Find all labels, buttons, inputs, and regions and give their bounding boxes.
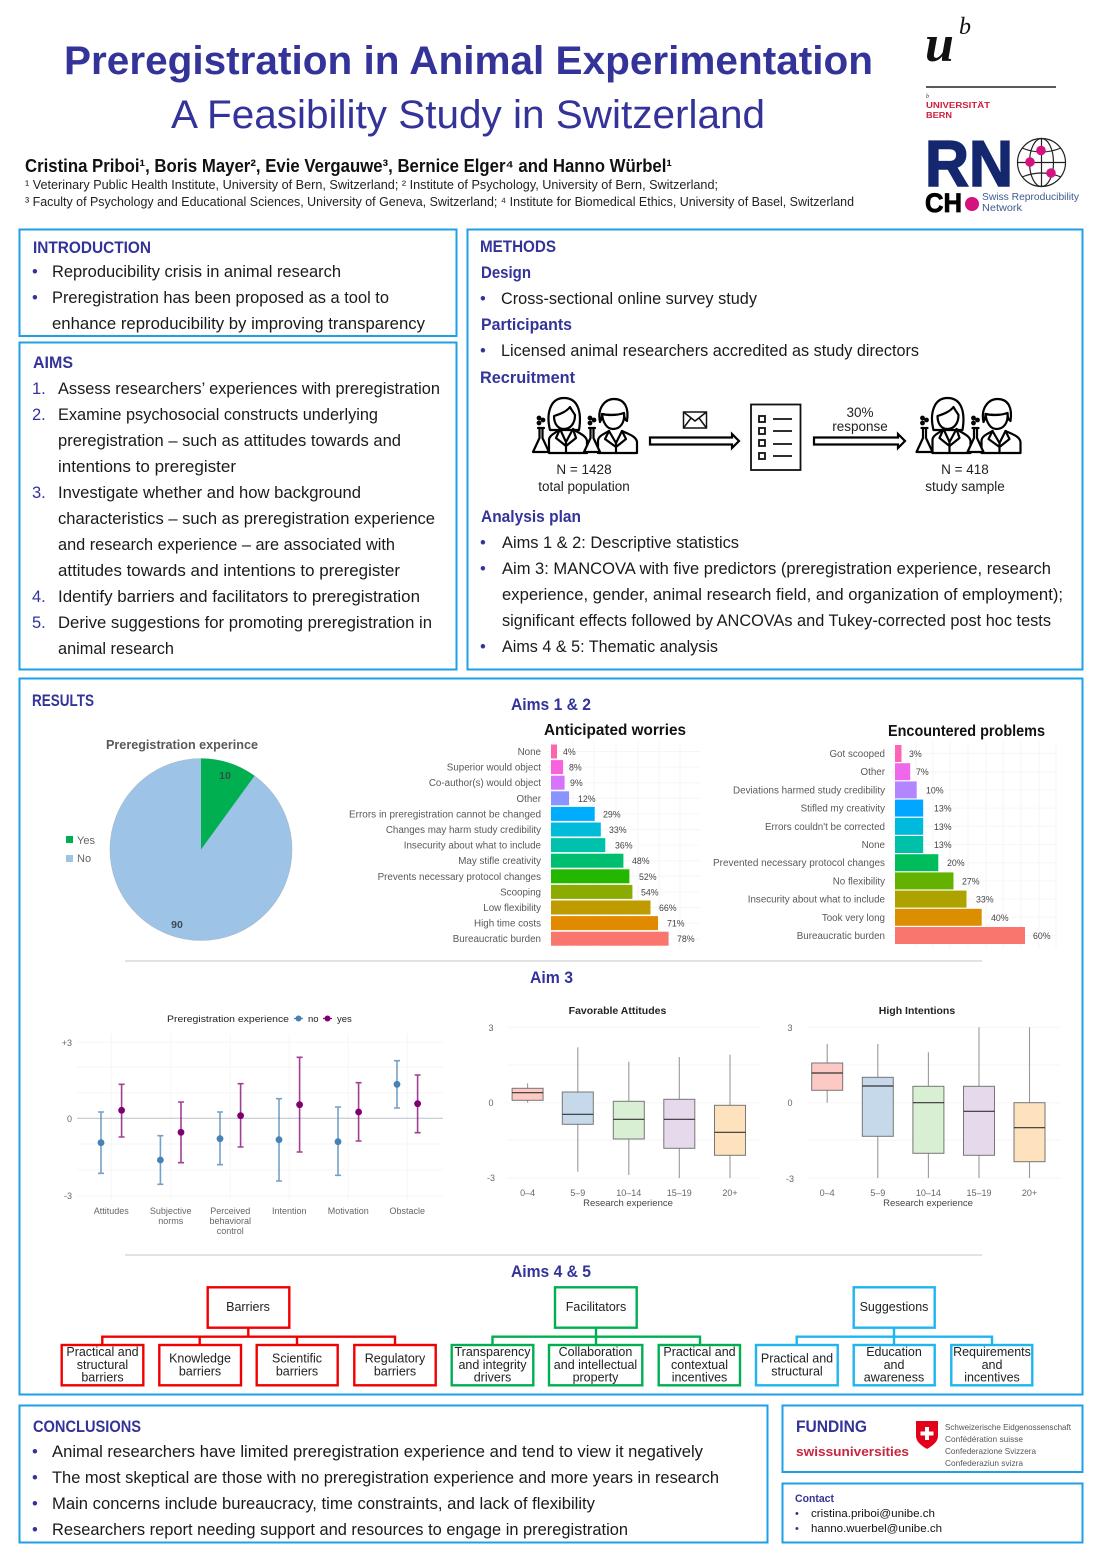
bar chart: encountered problems: Encountered problems xyxy=(888,723,1045,740)
dot plot: preregistration experience by construct: Attitudes xyxy=(94,1206,129,1216)
bar chart: encountered problems: Deviations harmed study credibility xyxy=(733,785,885,796)
dot plot: preregistration experience by construct: +3 xyxy=(62,1038,72,1048)
panel: aims: 2. xyxy=(32,406,46,424)
bar chart: encountered problems: Took very long xyxy=(822,913,885,924)
panel: conclusions: • xyxy=(32,1443,38,1461)
logo: Swiss Reproducibility Network: RN xyxy=(925,127,1013,200)
bar chart: anticipated worries: None xyxy=(518,747,542,758)
title: Preregistration in Animal Experimentation xyxy=(64,39,873,83)
bar chart: anticipated worries: Errors in preregistration cannot be changed xyxy=(349,809,541,820)
title xyxy=(64,39,873,137)
bar chart: anticipated worries: Superior would object xyxy=(447,763,541,774)
dot plot: preregistration experience by construct: Subjective xyxy=(150,1206,191,1216)
panel: results xyxy=(20,678,1082,1394)
panel: aims: attitudes towards and intentions to preregister xyxy=(58,562,401,580)
tree: facilitators: contextual xyxy=(671,1358,728,1372)
panel: funding: Schweizerische Eidgenossenschaft xyxy=(945,1422,1072,1432)
panel: conclusions: Animal researchers have limited preregistration experience and tend to view it negatively xyxy=(52,1443,704,1461)
icon: study sample researchers xyxy=(916,398,1020,453)
bar chart: encountered problems: Stifled my creativity xyxy=(801,804,885,815)
panel: introduction: • xyxy=(32,289,38,307)
panel: funding: Confederaziun svizra xyxy=(945,1458,1023,1468)
tree: facilitators: property xyxy=(573,1370,619,1384)
bar chart: encountered problems: 13% xyxy=(934,804,952,814)
tree: barriers: barriers xyxy=(276,1364,318,1378)
logo: University of Bern: b xyxy=(959,14,971,40)
pie chart: preregistration experience: 10 xyxy=(219,770,231,782)
panel: introduction: • xyxy=(32,263,38,281)
affiliations xyxy=(25,178,854,209)
bar chart: encountered problems: 3% xyxy=(909,749,922,759)
panel: methods: Aims 1 & 2: Descriptive statistics xyxy=(502,534,739,552)
tree: suggestions: and xyxy=(982,1358,1002,1372)
bar chart: anticipated worries: 36% xyxy=(615,841,633,851)
panel: contact: cristina.priboi@unibe.ch xyxy=(811,1508,935,1520)
legend: preregistration experience: yes xyxy=(337,1014,352,1025)
tree: suggestions: incentives xyxy=(964,1370,1020,1384)
dot plot: preregistration experience by construct: behavioral xyxy=(210,1216,251,1226)
bar chart: anticipated worries: 8% xyxy=(569,763,582,773)
pie chart: preregistration experience xyxy=(66,738,292,940)
logo: Swiss Reproducibility Network: Swiss Reproducibility xyxy=(982,191,1080,203)
panel: aims: 3. xyxy=(32,484,46,502)
panel: conclusions: The most skeptical are those with no preregistration experience and more years in research xyxy=(52,1469,719,1487)
box plot: high intentions: 10–14 xyxy=(916,1188,941,1198)
title: A Feasibility Study in Switzerland xyxy=(171,93,765,137)
bar chart: encountered problems: 33% xyxy=(976,895,994,905)
bar chart: anticipated worries: 78% xyxy=(677,934,695,944)
icon: questionnaire xyxy=(751,404,800,470)
panel: funding xyxy=(782,1406,1082,1472)
box plot: high intentions: 3 xyxy=(787,1023,793,1033)
bar chart: anticipated worries: Bureaucratic burden xyxy=(453,934,541,945)
icon: envelope xyxy=(684,412,706,428)
logo: Swiss Reproducibility Network: Network xyxy=(982,202,1023,214)
panel: methods: • xyxy=(480,342,486,360)
panel: conclusions: CONCLUSIONS xyxy=(33,1418,141,1436)
legend: preregistration experience xyxy=(167,1014,352,1025)
tree: facilitators: and intellectual xyxy=(554,1358,637,1372)
bar chart: anticipated worries: Other xyxy=(516,794,542,805)
box plot: favorable attitudes: Favorable Attitudes xyxy=(569,1005,666,1017)
bar chart: anticipated worries: 54% xyxy=(641,887,659,897)
box plot: favorable attitudes: 3 xyxy=(488,1023,494,1033)
panel: methods: Design xyxy=(481,264,531,282)
bar chart: encountered problems: 60% xyxy=(1033,931,1051,941)
bar chart: encountered problems: 10% xyxy=(926,785,944,795)
panel: contact: Contact xyxy=(795,1493,834,1505)
logo: Swiss Reproducibility Network xyxy=(925,127,1080,218)
panel: contact: • xyxy=(795,1523,799,1535)
bar chart: anticipated worries: 29% xyxy=(603,809,621,819)
bar chart: anticipated worries: Prevents necessary protocol changes xyxy=(378,872,541,883)
recruitment labels xyxy=(538,405,1005,494)
panel: methods: METHODS xyxy=(480,238,556,256)
panel: aims: Derive suggestions for promoting preregistration in xyxy=(58,614,432,632)
tree: facilitators: Practical and xyxy=(663,1345,736,1359)
bar chart: anticipated worries: 9% xyxy=(570,778,583,788)
bar chart: anticipated worries: Changes may harm study credibility xyxy=(386,825,541,836)
icon: total population researchers xyxy=(533,398,637,453)
recruitment labels: total population xyxy=(538,479,630,494)
logo: University of Bern xyxy=(925,14,1056,120)
legend: preregistration experience: Preregistration experience xyxy=(167,1014,289,1025)
panel: aims: 1. xyxy=(32,380,46,398)
panel: results: Aim 3 xyxy=(530,969,573,987)
box plot: favorable attitudes: 5–9 xyxy=(570,1188,585,1198)
legend: preregistration experience: no xyxy=(308,1014,319,1025)
panel: contact: hanno.wuerbel@unibe.ch xyxy=(811,1523,942,1535)
panel: conclusions: • xyxy=(32,1469,38,1487)
tree: facilitators: drivers xyxy=(474,1370,511,1384)
panel: aims: intentions to preregister xyxy=(58,458,237,476)
panel: contact xyxy=(782,1484,1082,1542)
recruitment labels: study sample xyxy=(925,479,1005,494)
bar chart: anticipated worries: Co-author(s) would object xyxy=(429,778,541,789)
bar chart: anticipated worries xyxy=(349,722,700,948)
tree: facilitators: Collaboration xyxy=(559,1345,632,1359)
authors: Cristina Priboi¹, Boris Mayer², Evie Vergauwe³, Bernice Elger⁴ and Hanno Würbel¹ xyxy=(25,156,672,176)
panel: introduction: Reproducibility crisis in animal research xyxy=(52,263,341,281)
bar chart: anticipated worries: 71% xyxy=(667,919,685,929)
recruitment labels: N = 1428 xyxy=(556,462,612,477)
tree: facilitators: Facilitators xyxy=(566,1300,626,1314)
tree: barriers: Knowledge xyxy=(169,1352,231,1366)
bar chart: encountered problems: No flexibility xyxy=(833,876,885,887)
dot plot: preregistration experience by construct: 0 xyxy=(67,1114,72,1124)
box plot: favorable attitudes: 0 xyxy=(488,1098,494,1108)
bar chart: anticipated worries: 66% xyxy=(659,903,677,913)
panel: aims: preregistration – such as attitudes towards and xyxy=(58,432,401,450)
logo: University of Bern: b xyxy=(926,94,929,100)
panel: conclusions: • xyxy=(32,1521,38,1539)
box plot: favorable attitudes: Research experience xyxy=(583,1198,673,1209)
tree: facilitators: incentives xyxy=(672,1370,727,1384)
recruitment labels: response xyxy=(832,419,888,434)
panel: methods: Aim 3: MANCOVA with five predictors (preregistration experience, research xyxy=(502,560,1051,578)
panel: aims: Assess researchers’ experiences with preregistration xyxy=(58,380,440,398)
bar chart: anticipated worries: 48% xyxy=(632,856,650,866)
recruitment labels: 30% xyxy=(846,405,874,420)
bar chart: anticipated worries: 33% xyxy=(609,825,627,835)
dot plot: preregistration experience by construct: Obstacle xyxy=(390,1206,425,1216)
panel: aims: 5. xyxy=(32,614,46,632)
bar chart: encountered problems: 27% xyxy=(962,876,980,886)
box plot: high intentions: -3 xyxy=(786,1174,794,1184)
logo: University of Bern: BERN xyxy=(926,111,952,120)
dot plot: preregistration experience by construct: Motivation xyxy=(328,1206,369,1216)
bar chart: anticipated worries: May stifle creativity xyxy=(458,856,541,867)
affiliations: ³ Faculty of Psychology and Educational Sciences, University of Geneva, Switzerland; ⁴ Institute for Biomedical Ethics, University of Basel, Switzerland xyxy=(25,195,854,209)
arrow: response xyxy=(814,434,905,448)
tree: suggestions: Suggestions xyxy=(860,1300,928,1314)
tree: barriers: Regulatory xyxy=(365,1352,426,1366)
panel: conclusions: Researchers report needing support and resources to engage in preregistration xyxy=(52,1521,628,1539)
panel: methods: Recruitment xyxy=(480,369,575,387)
panel: funding: swissuniversities xyxy=(796,1444,909,1459)
tree: barriers: barriers xyxy=(81,1370,124,1384)
tree: suggestions: Education xyxy=(866,1345,922,1359)
box plot: high intentions xyxy=(786,1005,1060,1209)
tree: barriers: barriers xyxy=(179,1364,221,1378)
panel: results: RESULTS xyxy=(32,692,94,710)
logo: University of Bern: u xyxy=(925,16,954,73)
panel: methods: experience, gender, animal research field, and organization of employment); xyxy=(502,586,1063,604)
tree: barriers: Barriers xyxy=(226,1300,270,1314)
bar chart: encountered problems: 7% xyxy=(916,767,929,777)
panel: results: Aims 1 & 2 xyxy=(511,696,591,714)
bar chart: anticipated worries: 12% xyxy=(578,794,596,804)
box plot: high intentions: 15–19 xyxy=(966,1188,992,1198)
tree: facilitators: Transparency xyxy=(455,1345,531,1359)
panel: aims xyxy=(20,342,456,670)
bar chart: encountered problems: None xyxy=(862,840,886,851)
bar chart: encountered problems: Got scooped xyxy=(829,749,885,760)
panel: methods: Analysis plan xyxy=(481,508,581,526)
panel: conclusions xyxy=(20,1406,768,1542)
bar chart: encountered problems: 40% xyxy=(991,913,1009,923)
dot plot: preregistration experience by construct: -3 xyxy=(64,1191,72,1201)
bar chart: anticipated worries: Low flexibility xyxy=(483,903,541,914)
box plot: favorable attitudes: 10–14 xyxy=(616,1188,641,1198)
panel: aims: 4. xyxy=(32,588,46,606)
tree: facilitators xyxy=(452,1287,740,1385)
dot plot: preregistration experience by construct: Perceived xyxy=(210,1206,250,1216)
panel: aims: Examine psychosocial constructs underlying xyxy=(58,406,378,424)
box plot: high intentions: Research experience xyxy=(883,1198,973,1209)
bar chart: encountered problems: 13% xyxy=(934,840,952,850)
box plot: favorable attitudes: 20+ xyxy=(722,1188,738,1198)
bar chart: encountered problems xyxy=(713,723,1057,948)
bar chart: anticipated worries: 52% xyxy=(639,872,657,882)
tree: suggestions: awareness xyxy=(864,1370,924,1384)
box plot: high intentions: High Intentions xyxy=(879,1005,955,1017)
bar chart: encountered problems: Bureaucratic burden xyxy=(797,931,885,942)
pie chart: preregistration experience: Yes xyxy=(77,835,95,847)
tree: barriers: Scientific xyxy=(272,1352,322,1366)
panel: aims: Identify barriers and facilitators to preregistration xyxy=(58,588,420,606)
bar chart: anticipated worries: 4% xyxy=(563,747,576,757)
tree: barriers xyxy=(62,1287,436,1385)
logo: Swiss Reproducibility Network: CH xyxy=(925,188,962,218)
panel: results: Aims 4 & 5 xyxy=(511,1263,591,1281)
panel: conclusions: Main concerns include bureaucracy, time constraints, and lack of flexibility xyxy=(52,1495,596,1513)
tree: suggestions: Requirements xyxy=(953,1345,1031,1359)
panel: methods: Cross-sectional online survey study xyxy=(501,290,758,308)
panel: methods: significant effects followed by ANCOVAs and Tukey-corrected post hoc tests xyxy=(502,612,1051,630)
bar chart: anticipated worries: Insecurity about what to include xyxy=(404,841,542,852)
panel: methods: Licensed animal researchers accredited as study directors xyxy=(501,342,919,360)
panel: aims: Investigate whether and how background xyxy=(58,484,361,502)
tree: barriers: structural xyxy=(77,1358,128,1372)
pie chart: preregistration experience: Preregistration experince xyxy=(106,738,258,752)
panel: introduction: INTRODUCTION xyxy=(33,239,151,257)
box plot: favorable attitudes: 15–19 xyxy=(667,1188,692,1198)
recruitment labels: N = 418 xyxy=(941,462,989,477)
bar chart: anticipated worries: Anticipated worries xyxy=(544,722,686,739)
bar chart: encountered problems: 13% xyxy=(934,822,952,832)
box plot: high intentions: 0 xyxy=(787,1098,793,1108)
panel: methods: • xyxy=(480,534,486,552)
pie chart: preregistration experience: No xyxy=(77,853,91,865)
panel: aims: characteristics – such as preregistration experience xyxy=(58,510,435,528)
bar chart: encountered problems: Other xyxy=(860,767,886,778)
panel: funding: Confederazione Svizzera xyxy=(945,1446,1036,1456)
bar chart: anticipated worries: Scooping xyxy=(500,887,541,898)
panel: funding: FUNDING xyxy=(796,1418,867,1436)
box plot: favorable attitudes: -3 xyxy=(487,1173,495,1183)
affiliations: ¹ Veterinary Public Health Institute, University of Bern, Switzerland; ² Institute of Psychology, University of Bern, Switzerland; xyxy=(25,178,718,192)
panel: introduction: Preregistration has been proposed as a tool to xyxy=(52,289,389,307)
tree: barriers: barriers xyxy=(374,1364,416,1378)
pie chart: preregistration experience: 90 xyxy=(171,919,183,931)
panel: funding: Confédération suisse xyxy=(945,1434,1023,1444)
panel: introduction: enhance reproducibility by improving transparency xyxy=(52,315,426,333)
dot plot: preregistration experience by construct: norms xyxy=(158,1216,184,1226)
panel: contact: • xyxy=(795,1508,799,1520)
dot plot: preregistration experience by construct: control xyxy=(217,1226,244,1236)
box plot: high intentions: 0–4 xyxy=(820,1188,835,1198)
bar chart: encountered problems: Errors couldn't be corrected xyxy=(765,822,885,833)
panel: methods: Participants xyxy=(481,316,572,334)
bar chart: encountered problems: Insecurity about what to include xyxy=(748,895,886,906)
dot plot: preregistration experience by construct xyxy=(62,1014,443,1236)
panel: methods xyxy=(468,230,1082,670)
tree: suggestions: structural xyxy=(771,1364,823,1378)
icon: Swiss shield xyxy=(916,1421,938,1449)
dot plot: preregistration experience by construct: Intention xyxy=(272,1206,307,1216)
box plot: favorable attitudes xyxy=(487,1005,760,1209)
bar chart: encountered problems: 20% xyxy=(947,858,965,868)
panel: introduction xyxy=(20,230,456,336)
panel: methods: • xyxy=(480,290,486,308)
panel: aims: animal research xyxy=(58,640,174,658)
panel: conclusions: • xyxy=(32,1495,38,1513)
panel: methods: • xyxy=(480,560,486,578)
arrow: to questionnaire xyxy=(650,434,739,448)
tree: facilitators: and integrity xyxy=(458,1358,527,1372)
logo: University of Bern: UNIVERSITÄT xyxy=(926,101,990,110)
tree: suggestions: Practical and xyxy=(761,1352,833,1366)
bar chart: anticipated worries: High time costs xyxy=(474,919,541,930)
box plot: high intentions: 20+ xyxy=(1022,1188,1037,1198)
panel: methods: • xyxy=(480,638,486,656)
tree: suggestions: and xyxy=(884,1358,904,1372)
panel: aims: AIMS xyxy=(33,354,73,372)
panel: methods: Aims 4 & 5: Thematic analysis xyxy=(502,638,718,656)
tree: barriers: Practical and xyxy=(66,1345,139,1359)
box plot: favorable attitudes: 0–4 xyxy=(520,1188,535,1198)
panel: aims: and research experience – are associated with xyxy=(58,536,395,554)
tree: suggestions xyxy=(756,1287,1032,1385)
bar chart: encountered problems: Prevented necessary protocol changes xyxy=(713,858,885,869)
box plot: high intentions: 5–9 xyxy=(870,1188,885,1198)
